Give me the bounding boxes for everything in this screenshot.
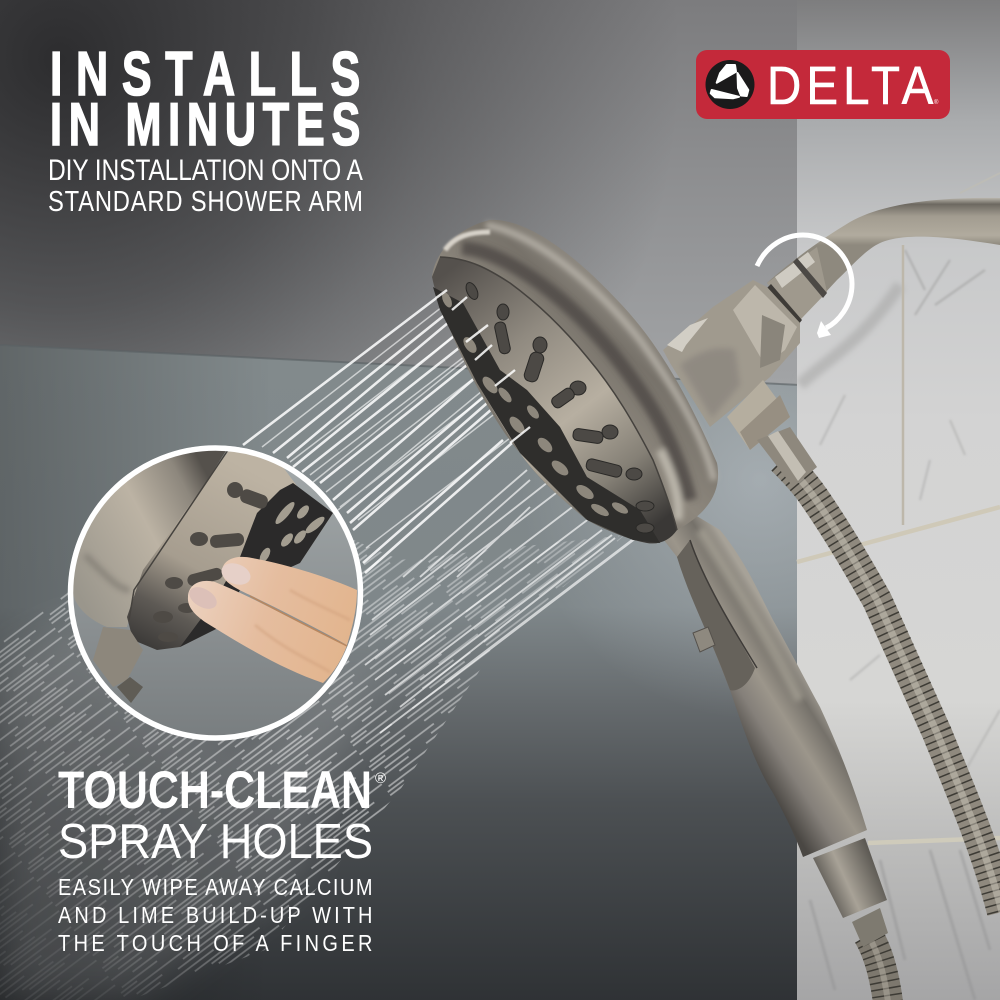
dark nozzle band on face (433, 287, 660, 543)
text: easily wipe away: THE TOUCH OF A FINGER (58, 929, 373, 956)
heading: Touch-Clean spray holes (58, 761, 386, 869)
shower head (432, 220, 718, 543)
inset face (127, 445, 333, 650)
heading: Touch-Clean spray holes: TOUCH-CLEAN (58, 761, 372, 820)
heading: Touch-Clean spray holes: ® (375, 770, 386, 787)
heading: installs in minutes: INSTALLS (50, 40, 360, 109)
logo: Delta badge: ® (934, 99, 939, 106)
heading: installs in minutes: IN MINUTES (50, 92, 360, 159)
water spray field (0, 536, 623, 1000)
inset dark nozzle band (180, 483, 333, 647)
background: marble tile wall (797, 0, 1000, 1000)
heading: Touch-Clean spray holes: SPRAY HOLES (58, 815, 373, 869)
light nozzles in band (440, 291, 630, 518)
inset fingers (186, 557, 357, 683)
inset spray holes (153, 482, 268, 622)
inset handle (93, 627, 143, 687)
spray holes (464, 281, 654, 533)
slide button (693, 627, 715, 652)
logo: Delta badge (696, 50, 950, 119)
text: easily wipe away: AND LIME BUILD-UP WITH (58, 901, 373, 928)
text: DIY installation (48, 153, 364, 218)
text: easily wipe away: EASILY WIPE AWAY CALCIUM (58, 873, 373, 900)
icon: delta triangle mark (711, 65, 748, 98)
near jets on face (436, 290, 530, 443)
text: DIY installation: STANDARD SHOWER ARM (48, 185, 363, 218)
collar (813, 838, 887, 918)
text: easily wipe away (58, 873, 373, 956)
swivel connector (663, 247, 827, 487)
shower handle (660, 515, 888, 947)
logo: Delta badge: DELTA (767, 55, 933, 116)
shower arm (767, 198, 1000, 320)
icon: rotation arrow (757, 235, 852, 338)
water jets (243, 290, 640, 733)
inset circle: touch-clean close-up (60, 440, 370, 750)
rim edge line (440, 257, 677, 530)
hose (782, 460, 1000, 1000)
water spray haze (0, 620, 380, 1000)
text: DIY installation: DIY INSTALLATION ONTO A (48, 153, 364, 187)
inset rim (74, 450, 226, 627)
heading: installs in minutes (50, 40, 360, 159)
inset band nozzles (260, 502, 324, 561)
